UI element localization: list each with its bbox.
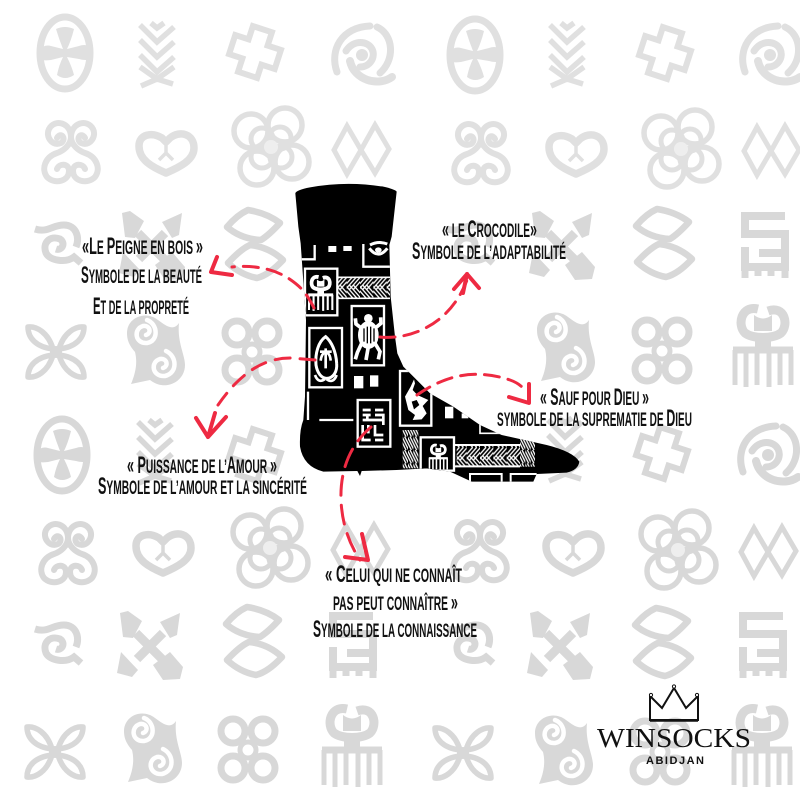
arrow: to love label xyxy=(196,358,315,437)
god symbol panel xyxy=(400,371,431,426)
text: love label: « PUISSANCE DE L’AMOUR » xyxy=(127,452,277,479)
text: knowledge label xyxy=(313,561,477,643)
text: knowledge label: PAS PEUT CONNAÎTRE » xyxy=(333,589,458,616)
sock illustration xyxy=(295,184,579,483)
logo: Winsocks Abidjan: WINSOCKS xyxy=(597,723,751,753)
icon: crown xyxy=(649,685,699,720)
text: love label xyxy=(98,452,307,500)
arrow: to knowledge label xyxy=(341,427,371,560)
text: knowledge label: « CELUI QUI NE CONNAÎT xyxy=(325,561,462,588)
love symbol panel xyxy=(309,328,342,387)
text: comb label xyxy=(81,233,203,320)
sock pattern xyxy=(301,243,537,483)
text: crocodile label: « LE CROCODILE» xyxy=(442,216,537,243)
comb panel xyxy=(305,269,337,315)
foot comb panel xyxy=(421,437,454,471)
text: comb label: SYMBOLE DE LA BEAUTÉ xyxy=(81,262,202,289)
crocodile panel xyxy=(352,306,384,365)
text: god label xyxy=(497,384,692,432)
arrow: to god label xyxy=(417,374,529,403)
text: comb label: ET DE LA PROPRETÉ xyxy=(93,293,189,320)
text: crocodile label: SYMBOLE DE L’ADAPTABILITÉ xyxy=(412,238,566,265)
text: comb label: «LE PEIGNE EN BOIS » xyxy=(82,233,203,260)
arrow: to comb label xyxy=(211,257,314,308)
text: love label: SYMBOLE DE L’AMOUR ET LA SINCÉRITÉ xyxy=(98,473,307,500)
knowledge symbol panel xyxy=(358,400,390,447)
logo: Winsocks Abidjan xyxy=(597,685,751,767)
text: god label: « SAUF POUR DIEU » xyxy=(540,384,649,411)
text: crocodile label xyxy=(412,216,566,265)
text: knowledge label: SYMBOLE DE LA CONNAISSANCE xyxy=(313,616,477,643)
logo: Winsocks Abidjan: ABIDJAN xyxy=(646,755,704,767)
arrow: to crocodile label xyxy=(380,274,479,337)
